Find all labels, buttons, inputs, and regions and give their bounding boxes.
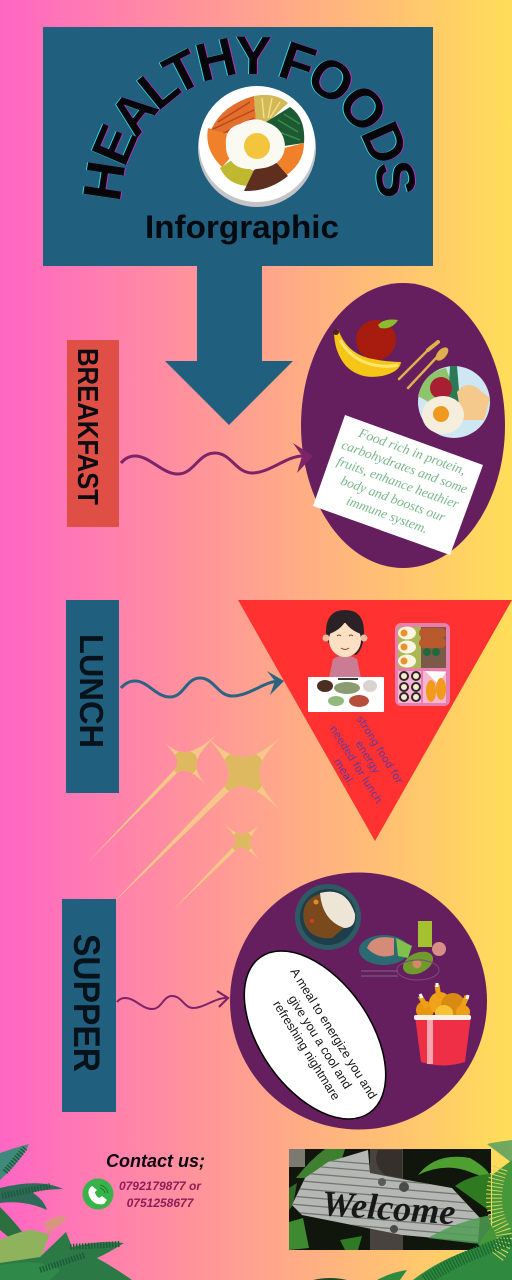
arrow: breakfast [121, 443, 313, 474]
icon: chicken bucket [414, 983, 471, 1066]
decoration: palm leaves right [313, 1140, 512, 1280]
icon: bento box [395, 623, 450, 706]
icon: woman eating [308, 610, 384, 712]
label: breakfast: BREAKFAST [71, 348, 103, 505]
panel: supper circle [215, 872, 487, 1144]
photo: welcome sign [289, 1149, 491, 1250]
title: Healthy Foods: HEALTHY FOODS [82, 36, 410, 200]
icon: banana and apple [333, 320, 401, 377]
label: supper [62, 899, 116, 1112]
arrow: lunch [121, 671, 284, 697]
text: phone numbers: 0751258677 [127, 1196, 195, 1210]
icon: salad plate and avocado [359, 921, 446, 980]
decoration: palm leaves left [0, 1144, 132, 1280]
icon: phone [82, 1178, 114, 1210]
text: phone numbers: 0792179877 or [119, 1179, 202, 1193]
icon: bibimbap bowl [198, 86, 316, 207]
arrow: down from header [165, 265, 293, 425]
panel: title header [43, 27, 433, 266]
text: lunch description [315, 709, 408, 813]
label: supper: SUPPER [66, 934, 107, 1072]
label: lunch [66, 600, 119, 793]
text bubble: supper: give you a cool and [286, 993, 355, 1091]
panel: lunch triangle [238, 600, 512, 841]
text bubble: supper: refreshing nightmare [270, 998, 343, 1103]
label: breakfast [67, 340, 119, 527]
text: phone numbers [119, 1179, 202, 1210]
label: lunch: LUNCH [73, 634, 110, 748]
text: lunch description: strong food for [354, 714, 405, 787]
photo: welcome sign: Welcome [320, 1183, 457, 1232]
text card: breakfast: fruits, enhance heathier [335, 453, 462, 512]
subtitle: Inforgraphic [145, 209, 339, 245]
panel: breakfast oval [301, 283, 505, 568]
text: lunch description: meal. [331, 756, 357, 788]
text: lunch description: energy [353, 739, 382, 776]
icon: curry bowl [295, 884, 361, 950]
icon: fork and spoon [399, 342, 451, 388]
arrow: supper [117, 991, 228, 1009]
text bubble: supper: A meal to energize you and [287, 966, 380, 1102]
text bubble: supper [215, 926, 415, 1144]
text card: breakfast: Food rich in protein, [356, 425, 468, 478]
title: Healthy Foods: HEALTHY FOODS [83, 36, 415, 200]
decoration: gold sparkles [88, 730, 285, 910]
text card: breakfast: carbohydrates and some [340, 437, 470, 496]
text card: breakfast: immune system. [344, 493, 430, 536]
text card: breakfast [313, 415, 483, 555]
title: Healthy Foods: HEALTHY FOODS [84, 36, 416, 200]
icon: breakfast plate [418, 366, 490, 438]
heading: contact us: Contact us; [106, 1151, 205, 1171]
contact block [82, 1151, 205, 1210]
text: lunch description: needed for lunch [327, 724, 384, 806]
text card: breakfast: body and boosts our [339, 473, 448, 525]
